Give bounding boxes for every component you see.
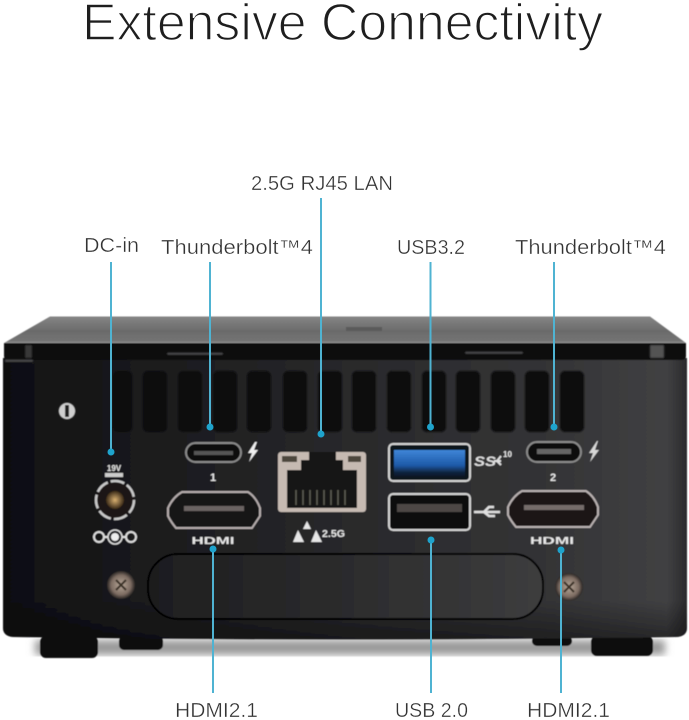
USB 2.0 port (389, 494, 500, 530)
callout: HDMI2.1 right (527, 546, 610, 720)
callout: DC-in: DC-in (84, 235, 139, 257)
rubber feet (40, 636, 653, 658)
Thunderbolt port 1 (186, 442, 258, 484)
DC-in jack: 19V (107, 464, 122, 473)
panel screw left (107, 571, 135, 599)
callout: HDMI2.1 left (175, 546, 258, 720)
HDMI port left (168, 492, 260, 547)
callout: 2.5G RJ45 LAN: 2.5G RJ45 LAN (251, 173, 393, 195)
callout: Thunderbolt 4 right: Thunderbolt™4 (515, 237, 666, 259)
callout: Thunderbolt 4 right (515, 237, 666, 430)
RJ45 LAN port (278, 452, 366, 542)
callout: USB3.2: USB3.2 (397, 237, 465, 259)
USB 3.2 port: 10 (503, 450, 512, 459)
HDMI port left: HDMI (192, 536, 235, 547)
HDMI port right (508, 491, 598, 547)
lid logo (346, 327, 382, 331)
Thunderbolt port 2: 2 (550, 472, 556, 484)
callout: 2.5G RJ45 LAN (251, 173, 393, 438)
callout: USB 2.0 (395, 536, 468, 720)
callout: Thunderbolt 4 left: Thunderbolt™4 (161, 237, 313, 259)
Thunderbolt port 1: 1 (210, 472, 216, 484)
lid top surface (4, 316, 686, 343)
lid front edge (4, 343, 686, 360)
chassis body (3, 358, 687, 640)
RJ45 LAN port: 2.5G (322, 529, 345, 540)
mini PC rear view (3, 316, 687, 658)
chassis lower shading (3, 600, 687, 640)
lid highlights (5, 345, 664, 362)
callout: Thunderbolt 4 left (161, 237, 313, 430)
USB 3.2 port (389, 444, 512, 481)
lock slot (45, 401, 90, 421)
callout: DC-in (84, 235, 139, 456)
HDMI port right: HDMI (530, 536, 574, 547)
ground shadow (35, 640, 665, 655)
Thunderbolt port 2 (527, 441, 599, 484)
removable bottom panel (148, 554, 543, 619)
USB 3.2 port: SS (474, 453, 497, 469)
callout: USB3.2 (397, 237, 465, 430)
DC-in jack (94, 464, 136, 544)
ventilation slots (113, 371, 584, 432)
panel screw right (555, 573, 583, 601)
